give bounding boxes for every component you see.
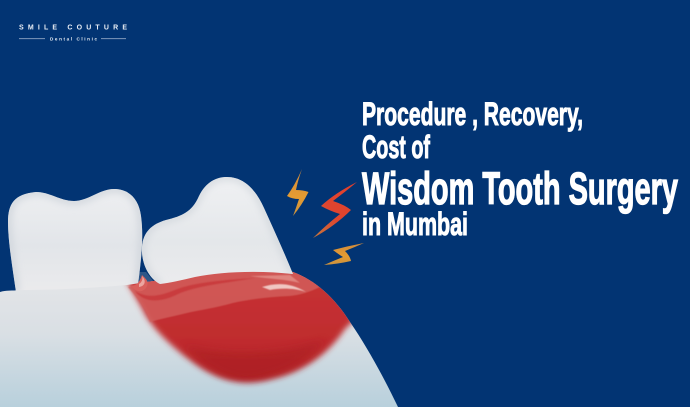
illustration: teeth and inflamed gum [0,170,400,407]
icon: left molar tooth [8,189,142,290]
icon: lower orange lightning bolt [324,243,364,265]
icon: gap shadow between teeth [135,272,154,288]
icon: right wisdom tooth [142,177,293,284]
lighter glossy band on the red gum [128,272,320,322]
darker lower band on the red gum [198,346,313,385]
dark red streak along the gum line [135,278,255,300]
title block: Cost of [362,129,430,165]
icon: small gum bubble between teeth [131,275,148,291]
icon: inflamed red gum area [124,272,354,387]
title block: in Mumbai [362,206,468,242]
title block: Procedure , Recovery, [362,96,583,132]
logo: Smile Couture Dental Clinic: SMILE COUTURE [19,24,127,32]
logo: Smile Couture Dental Clinic: Dental Clinic [50,36,97,42]
logo: Smile Couture Dental Clinic [19,24,127,42]
title block [362,96,678,242]
gloss highlight [262,284,306,292]
icon: gum [0,272,398,407]
icon: large red lightning bolt [313,182,357,238]
icon: small orange lightning bolt [287,169,308,216]
